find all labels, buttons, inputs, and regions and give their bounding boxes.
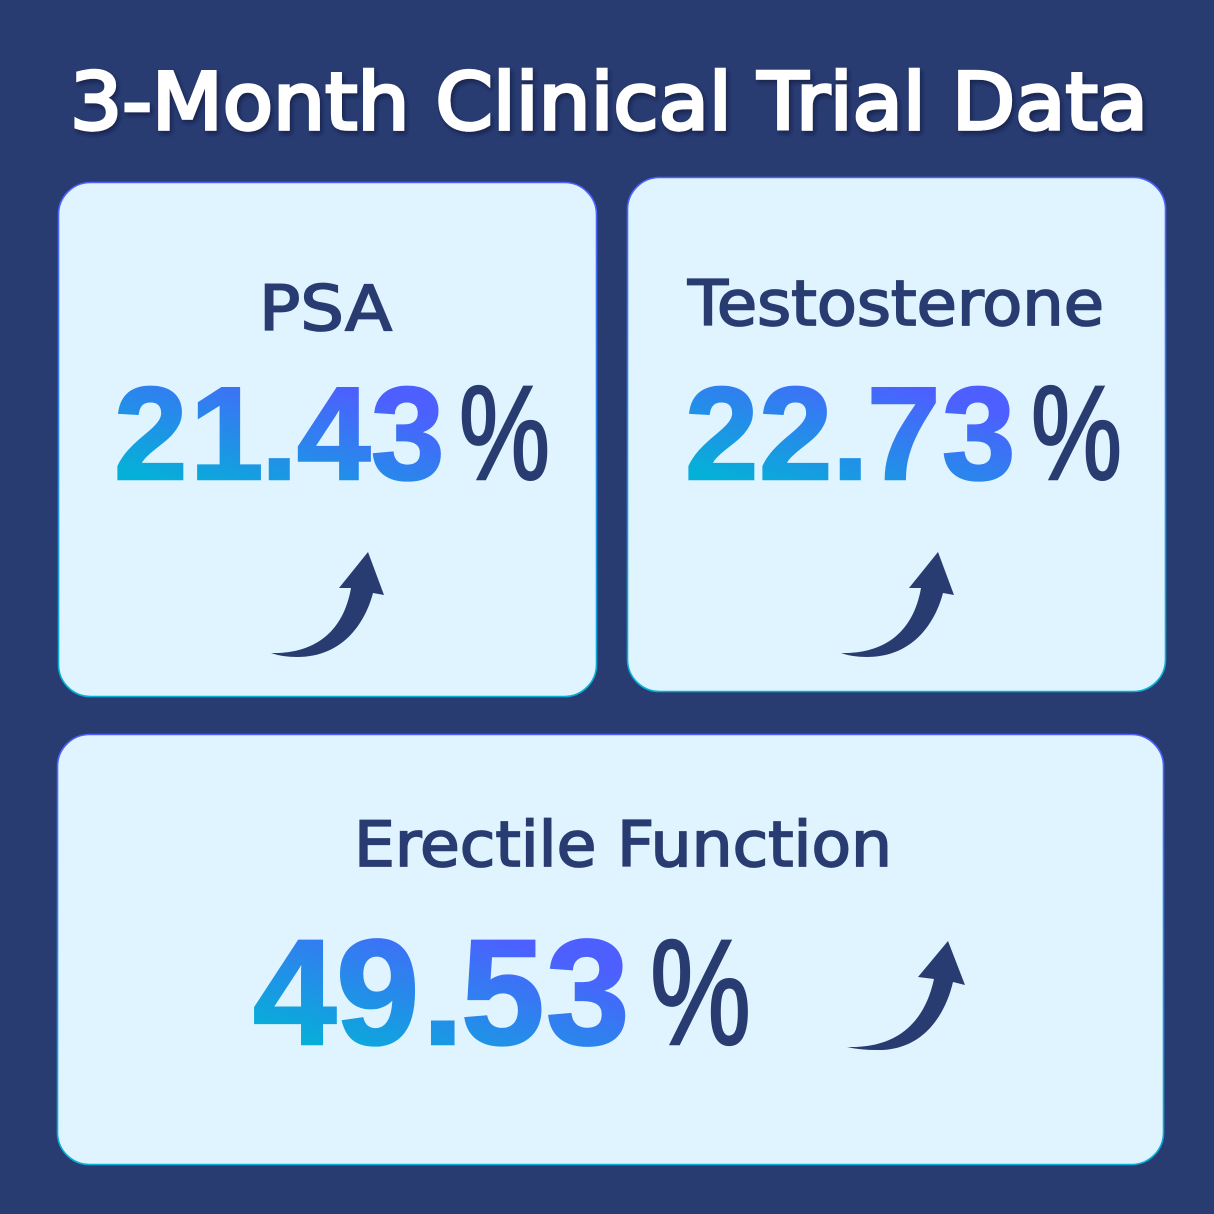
panel: Testosterone	[628, 178, 1166, 692]
icon: Erectile Function up arrow	[847, 941, 965, 1050]
title: 3-Month Clinical Trial Data	[70, 58, 1148, 148]
Erectile Function percent sign: %	[650, 908, 751, 1076]
panel: Erectile Function	[58, 734, 1164, 1164]
Erectile Function card background	[58, 734, 1164, 1164]
Testosterone heading: Testosterone	[687, 267, 1104, 340]
icon: Testosterone up arrow	[841, 552, 954, 657]
Testosterone value: 22.73	[685, 360, 1015, 507]
PSA value: 21.43	[114, 360, 444, 507]
PSA heading: PSA	[259, 272, 392, 345]
panel: PSA	[58, 182, 596, 696]
icon: PSA up arrow	[271, 552, 384, 657]
Erectile Function heading: Erectile Function	[354, 808, 892, 881]
PSA percent sign: %	[459, 359, 550, 508]
Testosterone card background	[628, 178, 1166, 692]
PSA card background	[58, 182, 596, 696]
Erectile Function value: 49.53	[253, 908, 629, 1076]
Testosterone percent sign: %	[1031, 359, 1122, 508]
